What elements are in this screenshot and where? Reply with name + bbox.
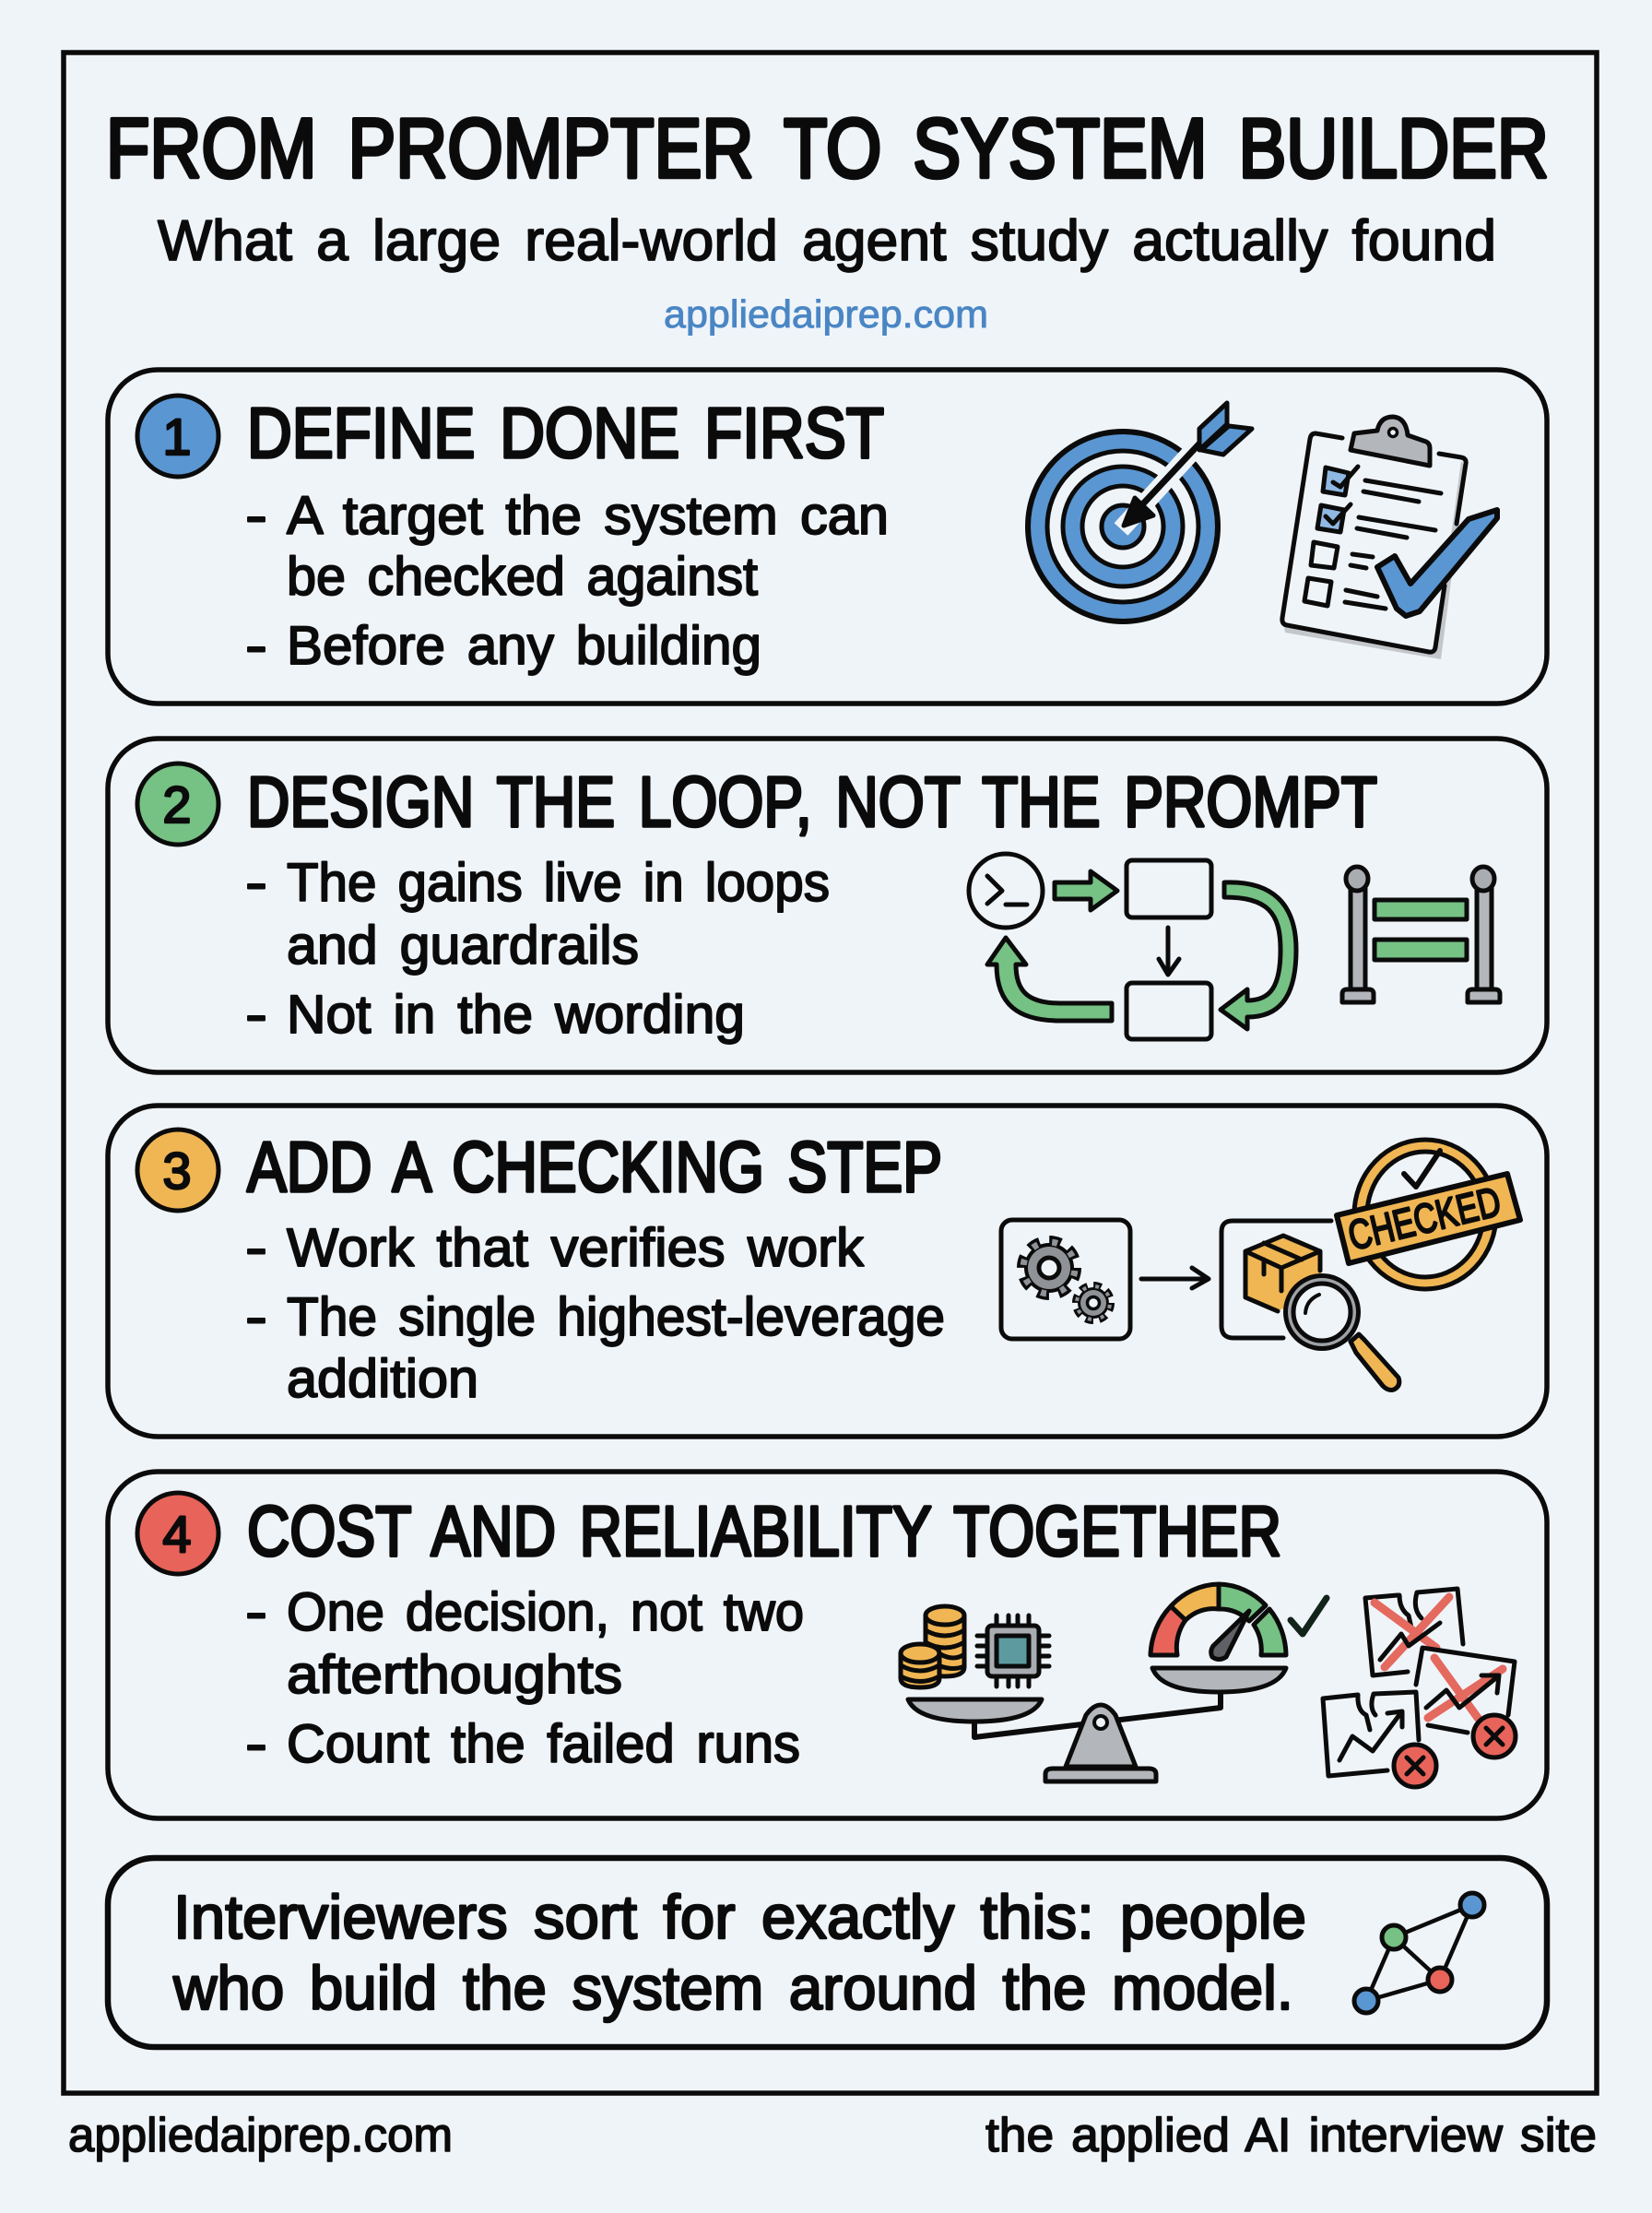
- heading: DEFINE DONE FIRST: [247, 394, 884, 473]
- icon: network graph: [1354, 1893, 1484, 2013]
- panel: conclusion callout: [108, 1858, 1547, 2047]
- bullet text: One decision, not two: [287, 1582, 804, 1642]
- icon: chip: [977, 1615, 1049, 1686]
- bullet text: Count the failed runs: [287, 1714, 800, 1774]
- bullet text: afterthoughts: [287, 1645, 622, 1705]
- number badge 4: [137, 1493, 218, 1574]
- number badge 2: [137, 763, 218, 845]
- bullet text: The single highest-leverage: [287, 1287, 945, 1347]
- footer: tagline: the applied AI interview site: [985, 2109, 1597, 2162]
- bullet text: -: [245, 1218, 267, 1278]
- icon: balance scale: [908, 1668, 1286, 1781]
- bullet text: be checked against: [287, 547, 758, 607]
- card frame: [108, 1472, 1547, 1818]
- icon: gears in a box: [1001, 1220, 1130, 1339]
- panel: define done first: [108, 370, 1547, 704]
- bullet text: and guardrails: [287, 916, 639, 976]
- bullet text: A target the system can: [287, 486, 889, 546]
- icon: checked stamp: [1337, 1140, 1520, 1289]
- number badge 4: 4: [162, 1505, 192, 1563]
- callout text: Interviewers sort for exactly this: people: [173, 1883, 1306, 1952]
- footer: site name: appliedaiprep.com: [68, 2109, 453, 2162]
- icon: guardrail: [1342, 867, 1500, 1002]
- bullet text: -: [245, 486, 267, 546]
- icon: target with arrow: [1028, 403, 1252, 621]
- bullet text: addition: [287, 1349, 478, 1409]
- number badge 2: 2: [162, 775, 192, 834]
- bullet text: -: [245, 1287, 267, 1347]
- bullet text: [245, 1582, 804, 1774]
- heading: DESIGN THE LOOP, NOT THE PROMPT: [247, 763, 1377, 842]
- number badge 3: 3: [162, 1142, 192, 1200]
- stamp word: CHECKED: [1343, 1178, 1505, 1260]
- card frame: [108, 1858, 1547, 2047]
- icon: broken charts: [1323, 1589, 1516, 1787]
- card frame: [108, 1106, 1547, 1437]
- icon: agent loop diagram: [969, 854, 1296, 1039]
- number badge 3: [137, 1130, 218, 1211]
- bullet text: -: [245, 616, 267, 676]
- panel: cost and reliability: [108, 1472, 1547, 1818]
- card frame: [108, 370, 1547, 704]
- panel: add a checking step: [108, 1106, 1547, 1437]
- bullet text: Not in the wording: [287, 985, 745, 1045]
- bullet text: -: [245, 853, 267, 913]
- bullet text: Before any building: [287, 616, 761, 676]
- callout text: who build the system around the model.: [172, 1954, 1293, 2023]
- icon: package under magnifier in a box: [1221, 1221, 1399, 1391]
- bullet text: Work that verifies work: [287, 1218, 865, 1278]
- icon: clipboard checklist: [1282, 417, 1497, 659]
- bullet text: -: [245, 1714, 267, 1774]
- bullet text: [245, 1218, 945, 1409]
- icon: gauge: [1150, 1584, 1327, 1660]
- bullet text: [245, 853, 830, 1045]
- arrow: work to check: [1141, 1268, 1209, 1288]
- heading: COST AND RELIABILITY TOGETHER: [247, 1492, 1281, 1571]
- heading: ADD A CHECKING STEP: [247, 1128, 942, 1207]
- site link: appliedaiprep.com: [664, 292, 988, 336]
- panel: design the loop: [108, 739, 1547, 1072]
- callout text: [172, 1883, 1306, 2023]
- bullet text: -: [245, 1582, 267, 1642]
- bullet text: [245, 486, 889, 676]
- number badge 1: 1: [162, 408, 192, 466]
- card frame: [108, 739, 1547, 1072]
- icon: coins: [901, 1606, 964, 1687]
- bullet text: -: [245, 985, 267, 1045]
- subtitle: What a large real-world agent study actually found: [158, 209, 1496, 273]
- bullet text: The gains live in loops: [287, 853, 830, 913]
- number badge 1: [137, 396, 218, 477]
